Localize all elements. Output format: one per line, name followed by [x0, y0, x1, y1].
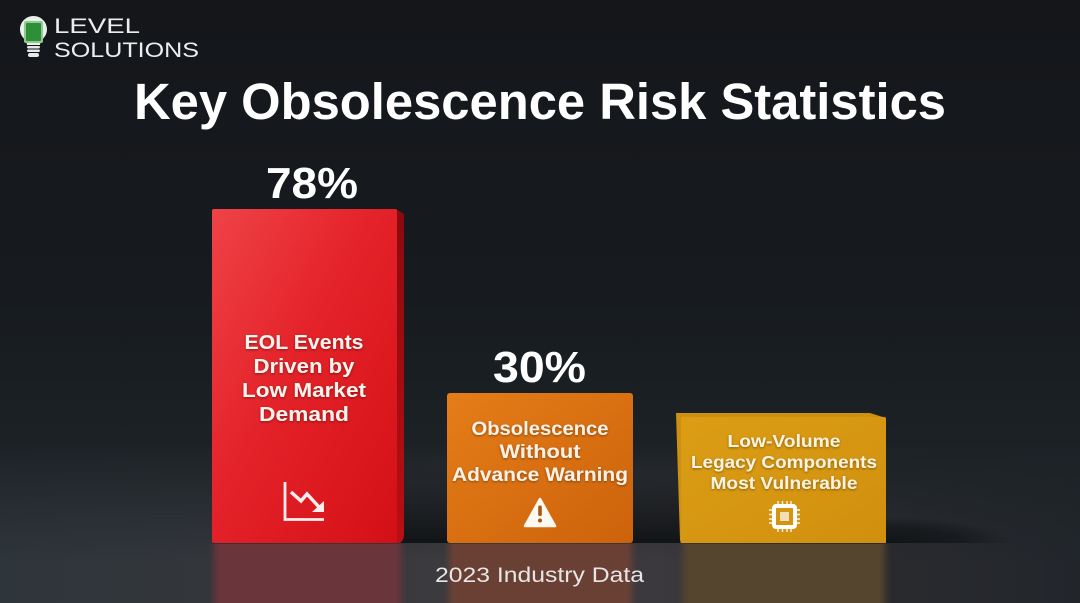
- title: Key Obsolescence Risk Statistics: [134, 73, 946, 130]
- value: 30%: 30%: [493, 343, 586, 392]
- bar label: [242, 331, 366, 426]
- bar label: Low Market: [242, 379, 366, 402]
- bar reflections: [210, 544, 888, 603]
- bar label: Demand: [259, 403, 349, 426]
- icon: warning triangle: [525, 499, 555, 526]
- bar label: [452, 419, 628, 486]
- value: 78%: 78%: [266, 159, 358, 208]
- bar label: Legacy Components: [691, 452, 877, 472]
- bar label: [691, 431, 877, 493]
- bar shadows: [400, 465, 1011, 543]
- bar label: Low-Volume: [728, 431, 841, 451]
- bar label: Obsolescence: [472, 419, 608, 440]
- bar: legacy components: [676, 413, 886, 543]
- logo wordmark: SOLUTIONS: [54, 38, 199, 62]
- icon: light bulb: [20, 16, 47, 57]
- logo wordmark: LEVEL: [54, 14, 140, 38]
- bar label: Driven by: [254, 355, 355, 378]
- icon: declining chart: [285, 482, 324, 520]
- bar: 30% no warning: [447, 343, 633, 543]
- logo: [20, 14, 199, 62]
- bar label: EOL Events: [244, 331, 364, 354]
- caption: 2023 Industry Data: [435, 564, 644, 587]
- icon: microchip: [769, 501, 800, 532]
- bar label: Without: [500, 442, 581, 463]
- logo wordmark: [54, 14, 199, 62]
- bar label: Most Vulnerable: [710, 473, 858, 493]
- bar label: Advance Warning: [452, 465, 628, 486]
- bar: 78% EOL events: [212, 159, 404, 543]
